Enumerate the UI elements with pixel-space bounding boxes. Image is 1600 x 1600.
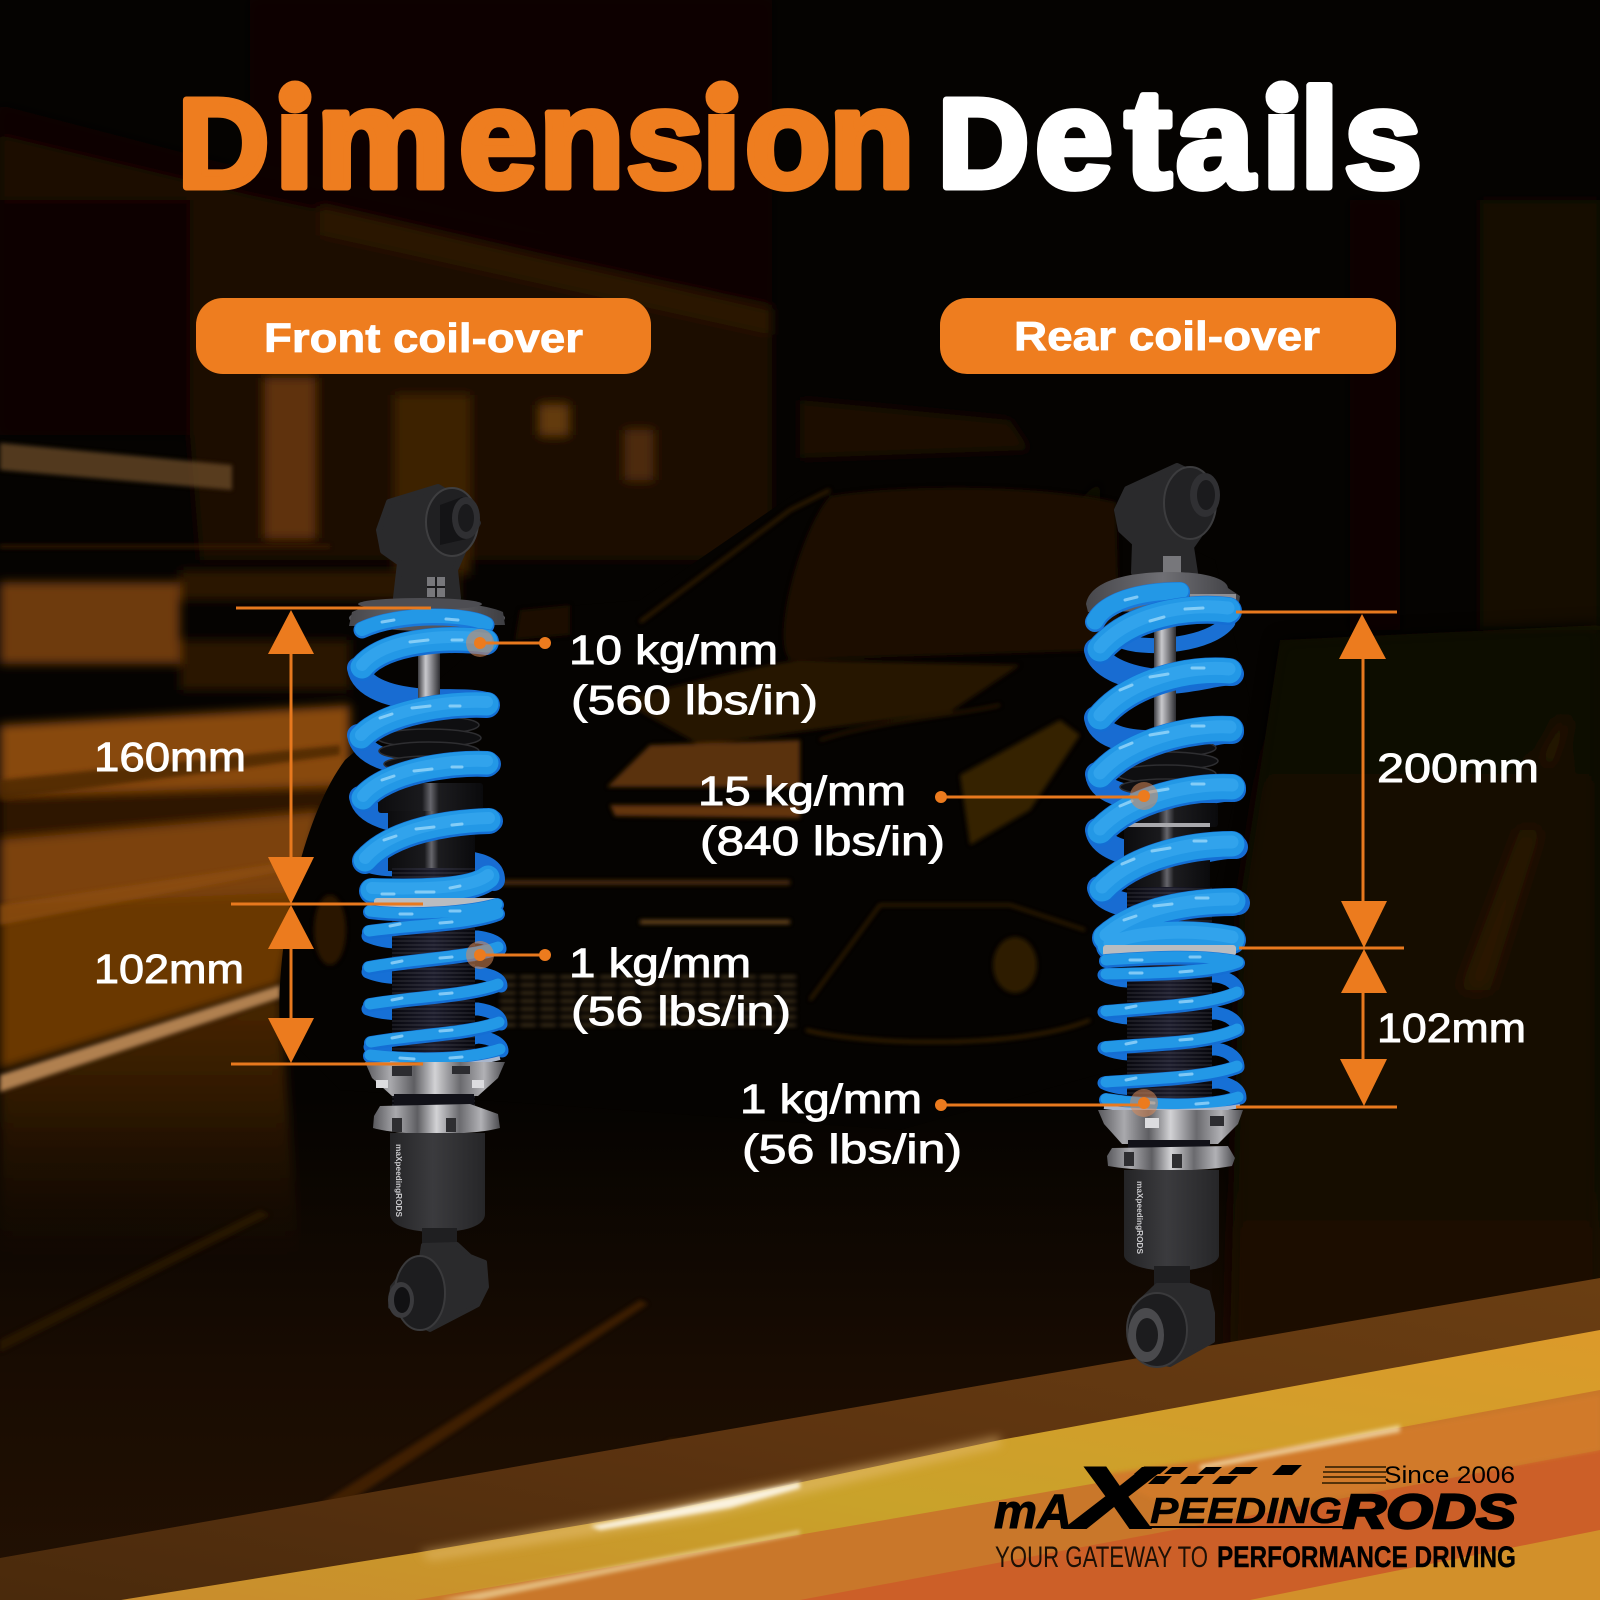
callout: front 1 kg/mm: 1 kg/mm [569,940,751,986]
title word: Details: D [938,73,1029,214]
dimension: front 102mm: 102mm [94,946,244,992]
front lower thread [394,1094,474,1114]
front top coil strokes [361,616,489,892]
title word: Dimension: o [745,60,831,217]
rear coil highlights [1120,597,1208,1104]
callout: rear 15 kg/mm [698,768,1158,864]
front damper body [377,640,483,1108]
title word: Dimension [182,80,910,192]
logo: maXpeedingRODS: PERFORMANCE DRIVING [1217,1541,1516,1574]
dimension: rear 102mm [1236,948,1526,1107]
background: bottom orange swoosh [0,1278,1600,1600]
rear upper coil strokes [1095,591,1233,946]
front height collar [365,1062,505,1096]
callout: rear 15 kg/mm: (840 lbs/in) [700,818,945,864]
title [178,60,1422,217]
rear bottom mount [1127,1266,1213,1367]
background: sign and streak details [0,443,686,1600]
callout: front 10 kg/mm [466,627,818,723]
front coil-over shock [349,487,505,1330]
dimension: front 160mm [94,608,431,904]
front top mount [379,487,480,598]
front spring plate [349,598,505,631]
title word: Dimension: D [178,73,269,214]
rear damper canister [1124,1170,1219,1271]
dimension: rear 102mm: 102mm [1377,1005,1526,1051]
front bottom mount [388,1228,487,1330]
callout: front 1 kg/mm [466,940,791,1034]
pill: Front coil-over: Front coil-over [264,315,583,361]
callout: rear 1 kg/mm: 1 kg/mm [740,1076,922,1122]
logo: wordmark: RODS [1343,1486,1516,1539]
title word: Dimension: n [539,60,625,217]
title word: Details [938,60,1422,217]
pill: Rear coil-over: Rear coil-over [1014,313,1320,359]
rear lower collar [1107,1146,1235,1170]
logo: speed lines [1322,1467,1386,1483]
front lower collar [373,1104,500,1134]
callout: front 10 kg/mm: (560 lbs/in) [571,677,818,723]
logo: maXpeedingRODS [994,1448,1516,1574]
dimension: rear 200mm [1236,612,1539,948]
logo: tagline: YOUR GATEWAY TO [995,1541,1208,1574]
logo: wordmark: X [1065,1448,1166,1547]
rear height collar [1098,1110,1243,1144]
pill: Rear coil-over [940,298,1396,374]
title word: Details: s [1344,60,1422,217]
rear damper canister: maXpeedingRODS [1135,1181,1144,1255]
dimension: front 160mm: 160mm [94,734,246,780]
front damper canister: maXpeedingRODS [394,1144,403,1218]
logo: since 2006: Since 2006 [1384,1462,1515,1489]
front spring rear sections [358,668,502,1051]
title word: Dimension: i [702,60,741,217]
title word: Dimension: s [626,60,704,217]
front coil highlights [380,619,462,1059]
logo: wordmark: mA [994,1486,1072,1539]
title word: Dimension: m [316,60,450,217]
dimension: front 102mm [94,904,423,1064]
callout: front 10 kg/mm: 10 kg/mm [569,627,778,673]
title word: Details: a [1176,60,1255,217]
rear damper body [1114,625,1218,1109]
dimension: rear 200mm: 200mm [1377,745,1539,791]
rear spring plate [1086,572,1240,612]
title word: Dimension: n [829,60,915,217]
rear coil-over shock [1086,466,1243,1367]
logo: wordmark: PEEDING [1150,1490,1342,1531]
pill: Front coil-over [196,298,651,374]
callout: rear 1 kg/mm: (56 lbs/in) [742,1126,962,1172]
background: buildings [0,0,1600,630]
background: car silhouette [279,488,1250,1130]
title word: Details: l [1300,60,1339,217]
callout: front 1 kg/mm: (56 lbs/in) [571,988,791,1034]
front spring seat [374,898,498,908]
front damper canister [390,1133,485,1232]
logo: checker flag [1134,1465,1302,1484]
rear spring seat [1103,945,1236,956]
logo: wordmark [994,1448,1516,1547]
title word: Dimension: e [459,60,537,217]
front lower coil strokes [369,904,500,1066]
title word: Details: i [1262,60,1301,217]
title word: Details: e [1035,60,1113,217]
rear spring rear sections [1096,622,1240,1098]
background: left road light streaks [0,570,460,1260]
rear lower thread [1128,1140,1210,1152]
title word: Dimension: i [275,60,314,217]
background: lower road floor [0,1100,1600,1600]
rear top mount [1117,466,1220,574]
rear lower coil strokes [1104,957,1240,1111]
callout: rear 15 kg/mm: 15 kg/mm [698,768,906,814]
background: right road [1230,625,1600,1350]
title word: Details: t [1125,60,1172,217]
callout: rear 1 kg/mm [740,1076,1158,1172]
